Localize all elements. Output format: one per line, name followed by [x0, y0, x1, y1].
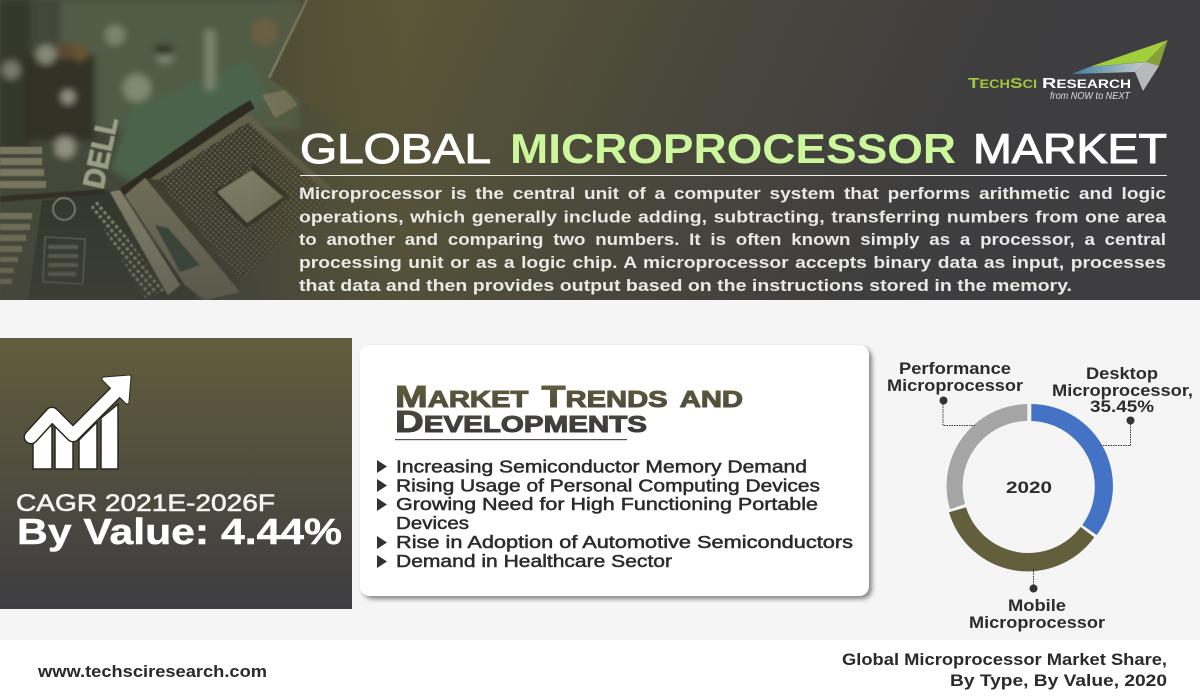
logo wing	[1072, 40, 1168, 91]
center year: 2020	[1006, 478, 1052, 497]
description text: to another and comparing two numbers. It is often known simply as a processor, a central	[299, 231, 1166, 249]
card heading: D EVELOPMENTS	[395, 404, 647, 439]
label: performance: Microprocessor	[887, 377, 1024, 395]
list text: Rise in Adoption of Automotive Semiconductors	[396, 532, 853, 552]
CAGR label: CAGR 2021E-2026F	[16, 490, 275, 517]
label: desktop	[1052, 365, 1193, 416]
label: desktop: Desktop	[1086, 365, 1158, 383]
list text: Rising Usage of Personal Computing Devices	[396, 476, 820, 496]
label: desktop: 35.45%	[1090, 398, 1154, 416]
list text: Increasing Semiconductor Memory Demand	[396, 456, 807, 476]
segment: desktop	[1031, 404, 1113, 535]
header gradient background	[0, 0, 1200, 300]
panel background	[0, 338, 352, 609]
socket lid	[270, 18, 302, 98]
header panel	[0, 0, 1200, 300]
chart caption	[842, 651, 1167, 690]
panel: CAGR	[0, 338, 352, 609]
title: MICROPROCESSOR	[510, 125, 956, 172]
leader: performance	[940, 396, 975, 426]
title: GLOBAL	[300, 125, 491, 172]
panel: market trends card	[360, 345, 869, 596]
DELL board marking: DELL	[78, 114, 125, 191]
card heading: M ARKET TRENDS AND	[395, 379, 743, 414]
segment: mobile	[949, 507, 1094, 571]
bullet markers	[377, 460, 387, 568]
description text: Microprocessor is the central unit of a computer system that performs arithmetic and logic	[299, 185, 1166, 203]
icon: growth chart	[31, 377, 129, 469]
socket retention arm	[115, 100, 255, 198]
donut chart	[887, 360, 1193, 632]
CAGR value: By Value: 4.44%	[17, 511, 342, 552]
label: performance: Performance	[899, 360, 1011, 378]
title	[300, 125, 1167, 172]
card heading	[395, 379, 743, 439]
description text: that data and then provides output based on the instructions stored in the memory.	[299, 277, 1072, 295]
black circuit board	[28, 190, 200, 300]
list text: Growing Need for High Functioning Portable	[396, 494, 818, 514]
list text	[396, 456, 853, 571]
logo wordmark: TECH SCI	[968, 75, 1037, 92]
website url: www.techsciresearch.com	[37, 662, 267, 681]
list text: Devices	[396, 513, 469, 533]
label: mobile: Microprocessor	[969, 614, 1106, 632]
chart caption: Global Microprocessor Market Share,	[842, 651, 1167, 669]
cpu socket	[151, 113, 340, 198]
description text	[299, 185, 1167, 295]
trends list	[377, 456, 853, 571]
leader: desktop	[1100, 416, 1134, 446]
footer band	[0, 640, 1200, 700]
description text: operations, which generally include adding, subtracting, transferring numbers from one area	[299, 208, 1167, 226]
label: mobile: Mobile	[1008, 597, 1066, 615]
heat sink fins	[0, 147, 46, 284]
title: MARKET	[973, 125, 1167, 172]
description text: processing unit or as a logic chip. A microprocessor accepts binary data as input, processes	[299, 254, 1166, 272]
segment: performance	[947, 404, 1027, 509]
chart caption: By Type, By Value, 2020	[950, 672, 1167, 690]
cpu die contacts	[217, 170, 283, 223]
label: desktop: Microprocessor,	[1052, 382, 1193, 400]
motherboard photo	[0, 0, 349, 300]
logo	[968, 40, 1168, 102]
heading underline	[395, 439, 627, 440]
title rule	[300, 175, 1167, 176]
logo tagline: from NOW to NEXT	[1050, 91, 1131, 102]
leader: mobile	[1030, 569, 1038, 592]
label: performance	[887, 360, 1024, 395]
card background	[360, 345, 869, 596]
logo: R ESEARCH	[1042, 75, 1131, 92]
list text: Demand in Healthcare Sector	[396, 551, 672, 571]
label: mobile	[969, 597, 1106, 632]
